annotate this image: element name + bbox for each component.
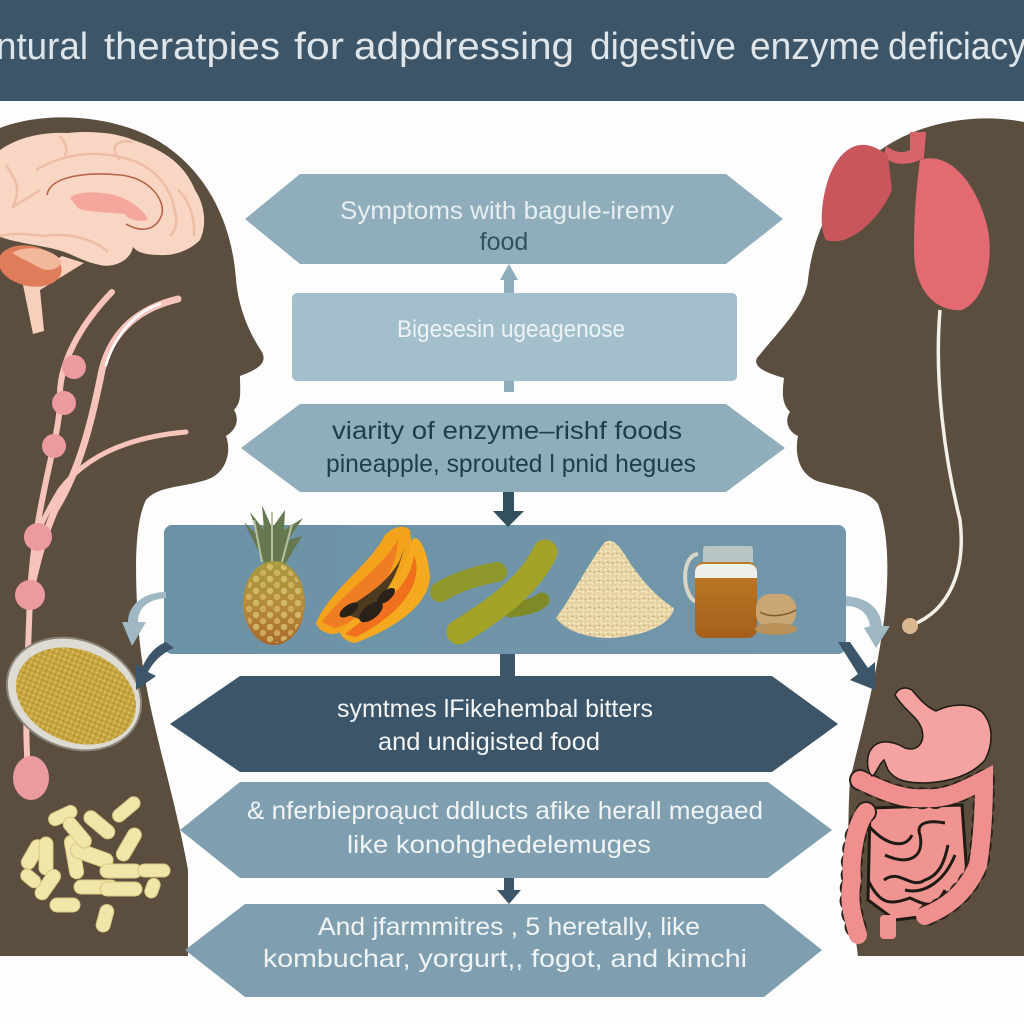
left head silhouette [0,117,264,956]
title banner: enzyme [750,26,880,68]
icon: grain pile [556,541,674,638]
arrow: right dark [838,642,875,690]
panel: variety of foods [241,404,785,492]
icon: honey jar [685,546,757,638]
icon: stomach and intestines [850,688,991,939]
panel: fermented products: like konohghedelemuges [347,831,651,859]
arrow: down to foods [493,492,524,527]
title banner: adpdressing [354,26,574,68]
rectum [880,915,896,939]
arrow: down to fermented foods [497,878,521,904]
icon: cord end [902,618,918,634]
arrow: down to symptoms [500,654,515,678]
icon: bowl of ground seeds [0,618,158,770]
stomach [868,688,991,783]
title banner: for [294,26,344,68]
icon: lungs [822,132,990,310]
icon: brain [0,132,204,334]
panel: symptoms herbal bitters [170,676,838,772]
icon: pineapple [243,505,305,645]
title banner: digestive [590,26,736,68]
icon: cookies [755,594,797,635]
title banner [0,0,1024,101]
panel: symptoms herbal bitters: and undigisted food [378,728,600,756]
panel: variety of foods: pineapple, sprouted l pnid hegues [326,450,696,478]
panel: fermented foods: And jfarmmitres , 5 heretally, like [318,913,700,941]
panel: variety of foods: viarity of enzyme–rishf foods [332,417,682,445]
icon: capsules [18,794,170,934]
icon: pickles [440,552,545,632]
panel: fermented products: & nferbieproąuct ddlucts afike herall megaed [247,797,763,825]
right head silhouette [756,118,1024,956]
arrow: right light [846,596,890,648]
panel: fermented products [180,782,832,878]
arrow: connector top [500,264,518,294]
panel: symptoms [245,174,783,264]
panel: digestion: Bigesesin ugeagenose [397,316,625,343]
panel: fermented foods: kombuchar, yorgurt,, fogot, and kimchi [263,945,747,973]
arrow: left light [122,592,166,646]
arrow: connector second [504,380,514,392]
title banner: theratpies [104,26,280,68]
panel: symptoms herbal bitters: symtmes lFikehembal bitters [337,695,653,723]
nerve cord right [912,310,961,625]
icon: nerve pathways [13,292,186,800]
panel: digestion [292,293,737,381]
small intestine block [868,805,968,920]
panel: foods strip [164,505,846,654]
panel: symptoms: food [480,228,528,256]
colon [850,780,984,935]
panel: symptoms: Symptoms with bagule-iremy [340,197,675,225]
panel: fermented foods [185,904,822,997]
arrow: left dark [136,642,174,690]
icon: papaya [316,527,430,643]
